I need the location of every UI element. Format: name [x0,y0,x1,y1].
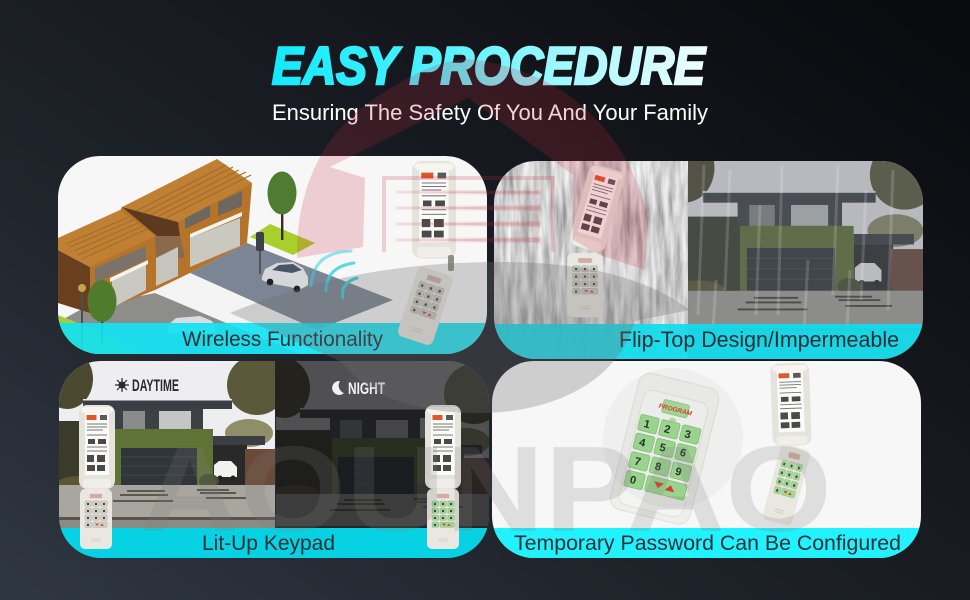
watermark: circle [603,368,743,508]
signpost [256,232,264,274]
large keypad: 3 [683,428,692,441]
night keypad with lit keys [425,405,461,549]
large keypad: 2 [663,423,672,436]
large keypad: 8 [653,461,662,474]
houses [58,159,252,316]
small keypad body [762,443,811,526]
panel: wireless functionality [58,156,487,354]
night label: NIGHT [348,379,385,398]
watermark: grey swoosh [230,262,690,413]
parked white car [262,262,308,292]
caption: Flip-Top Design/Impermeable [619,327,899,352]
subtitle: Ensuring The Safety Of You And Your Family [272,100,708,125]
large keypad: 5 [658,442,667,455]
title: EASY PROCEDURE [272,37,706,96]
large keypad: 4 [638,437,648,450]
day keypad [79,405,115,549]
keypad open cover [570,165,624,252]
panel: flip-top design [494,161,923,359]
keypad open cover [412,161,456,258]
large keypad: 0 [629,474,637,487]
caption band [494,324,923,359]
caption band [492,528,921,558]
photo: house in the rain [688,161,923,359]
daytime label [115,378,179,392]
keypad body [396,265,454,346]
driveway and street [58,243,393,354]
caption band [58,323,487,354]
large keypad: 7 [633,456,642,469]
panel: lit-up keypad [59,361,489,558]
caption band [59,528,489,558]
lower car [170,316,213,323]
daytime label: DAYTIME [132,376,179,395]
large keypad: 1 [642,418,651,431]
watermark: brand letters: AOUNPAO [140,421,832,557]
large keypad: PROGRAM [658,403,693,418]
night label [332,381,385,395]
keypad body [567,253,603,317]
caption: Lit-Up Keypad [202,532,335,555]
grass and tree [250,172,315,255]
caption: Wireless Functionality [182,328,383,351]
icon: wireless signal arcs [311,251,357,298]
photo: night house [276,361,489,554]
caption: Temporary Password Can Be Configured [514,532,901,555]
large keypad: 9 [674,466,683,479]
panel: temporary password [492,361,921,558]
hinge [448,255,454,271]
large keypad: 6 [679,447,687,460]
photo: daytime house [59,361,275,545]
foreground tree and lamp [78,280,116,350]
watermark: red house logo [297,59,648,270]
wood grain background [494,161,688,359]
large keypad [608,371,721,527]
small keypad cover [770,363,812,446]
